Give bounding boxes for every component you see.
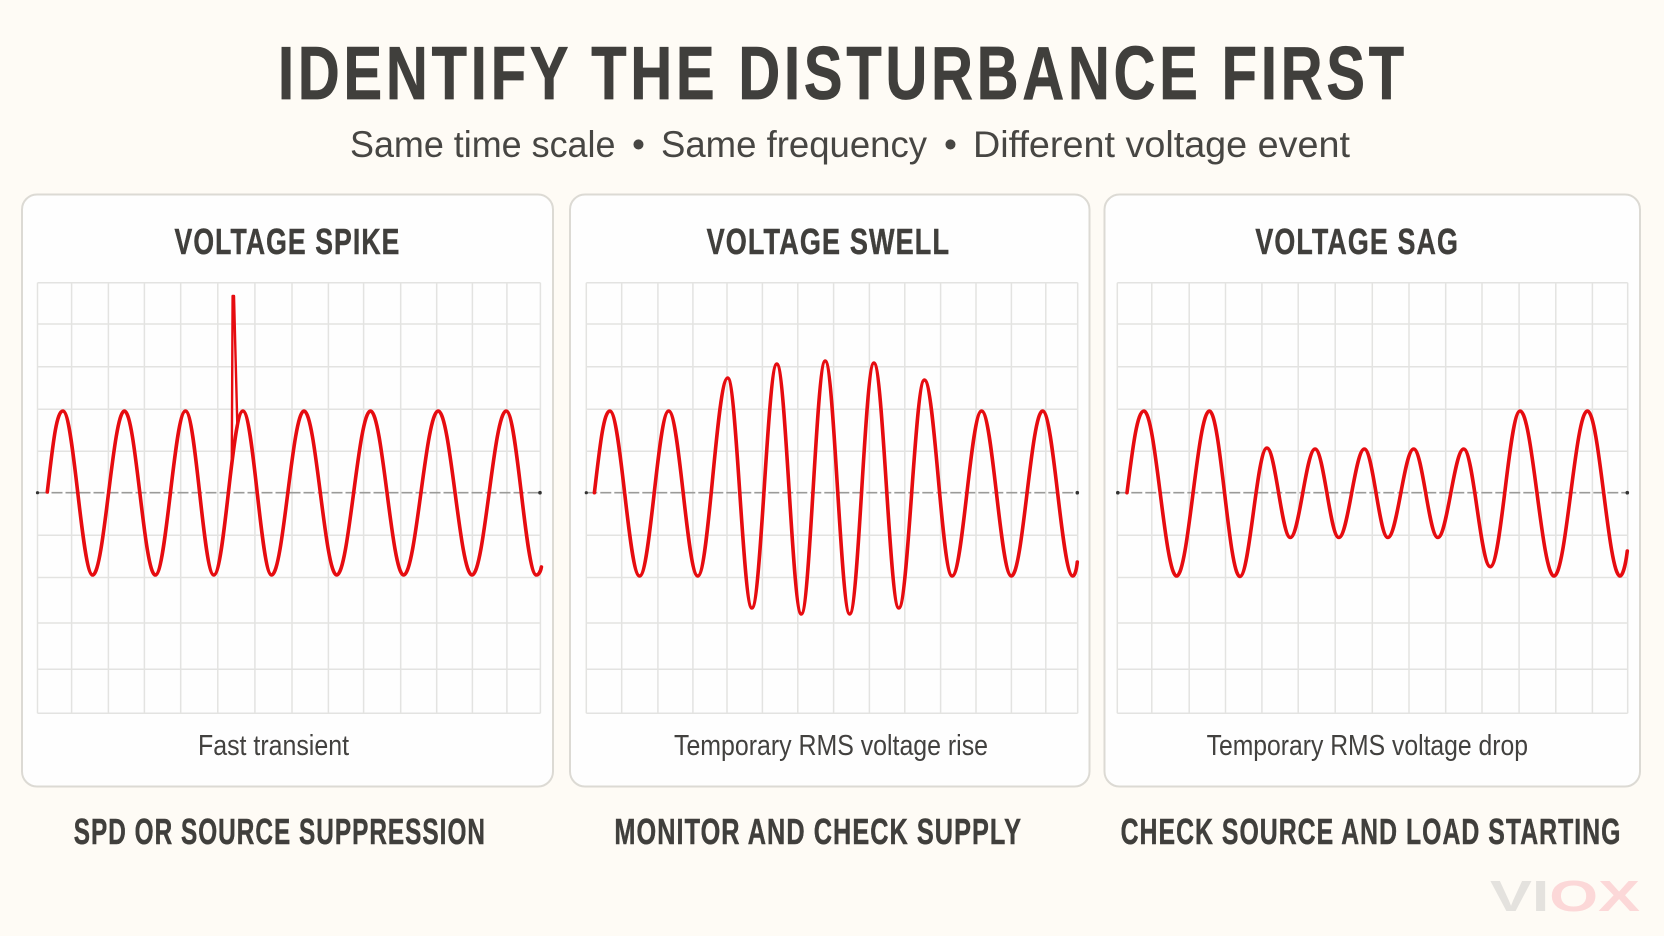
panel: voltage spike [22, 194, 553, 786]
logo: VIOX watermark: VI OX [1490, 872, 1640, 921]
heading: voltage swell: VOLTAGE SWELL [707, 221, 950, 262]
caption: Temporary RMS voltage drop [1207, 730, 1528, 762]
subtitle: Different voltage event [973, 124, 1351, 165]
subtitle: • [944, 124, 957, 165]
subtitle [350, 124, 1351, 165]
spike [232, 296, 237, 458]
panel: voltage sag [1104, 194, 1640, 786]
caption: Temporary RMS voltage rise [674, 730, 988, 762]
action label: swell: MONITOR AND CHECK SUPPLY [614, 811, 1022, 852]
chart: voltage swell waveform [585, 283, 1079, 713]
subtitle: Same time scale [350, 124, 616, 165]
heading: voltage sag: VOLTAGE SAG [1255, 221, 1459, 262]
chart: voltage spike waveform [36, 283, 542, 713]
chart: voltage sag waveform [1116, 283, 1629, 713]
caption: Fast transient [198, 730, 349, 762]
subtitle: • [632, 124, 645, 165]
subtitle: Same frequency [661, 124, 927, 165]
action label: spike: SPD OR SOURCE SUPPRESSION [74, 811, 486, 852]
panel: voltage swell [570, 194, 1090, 786]
heading: voltage spike: VOLTAGE SPIKE [174, 221, 400, 262]
